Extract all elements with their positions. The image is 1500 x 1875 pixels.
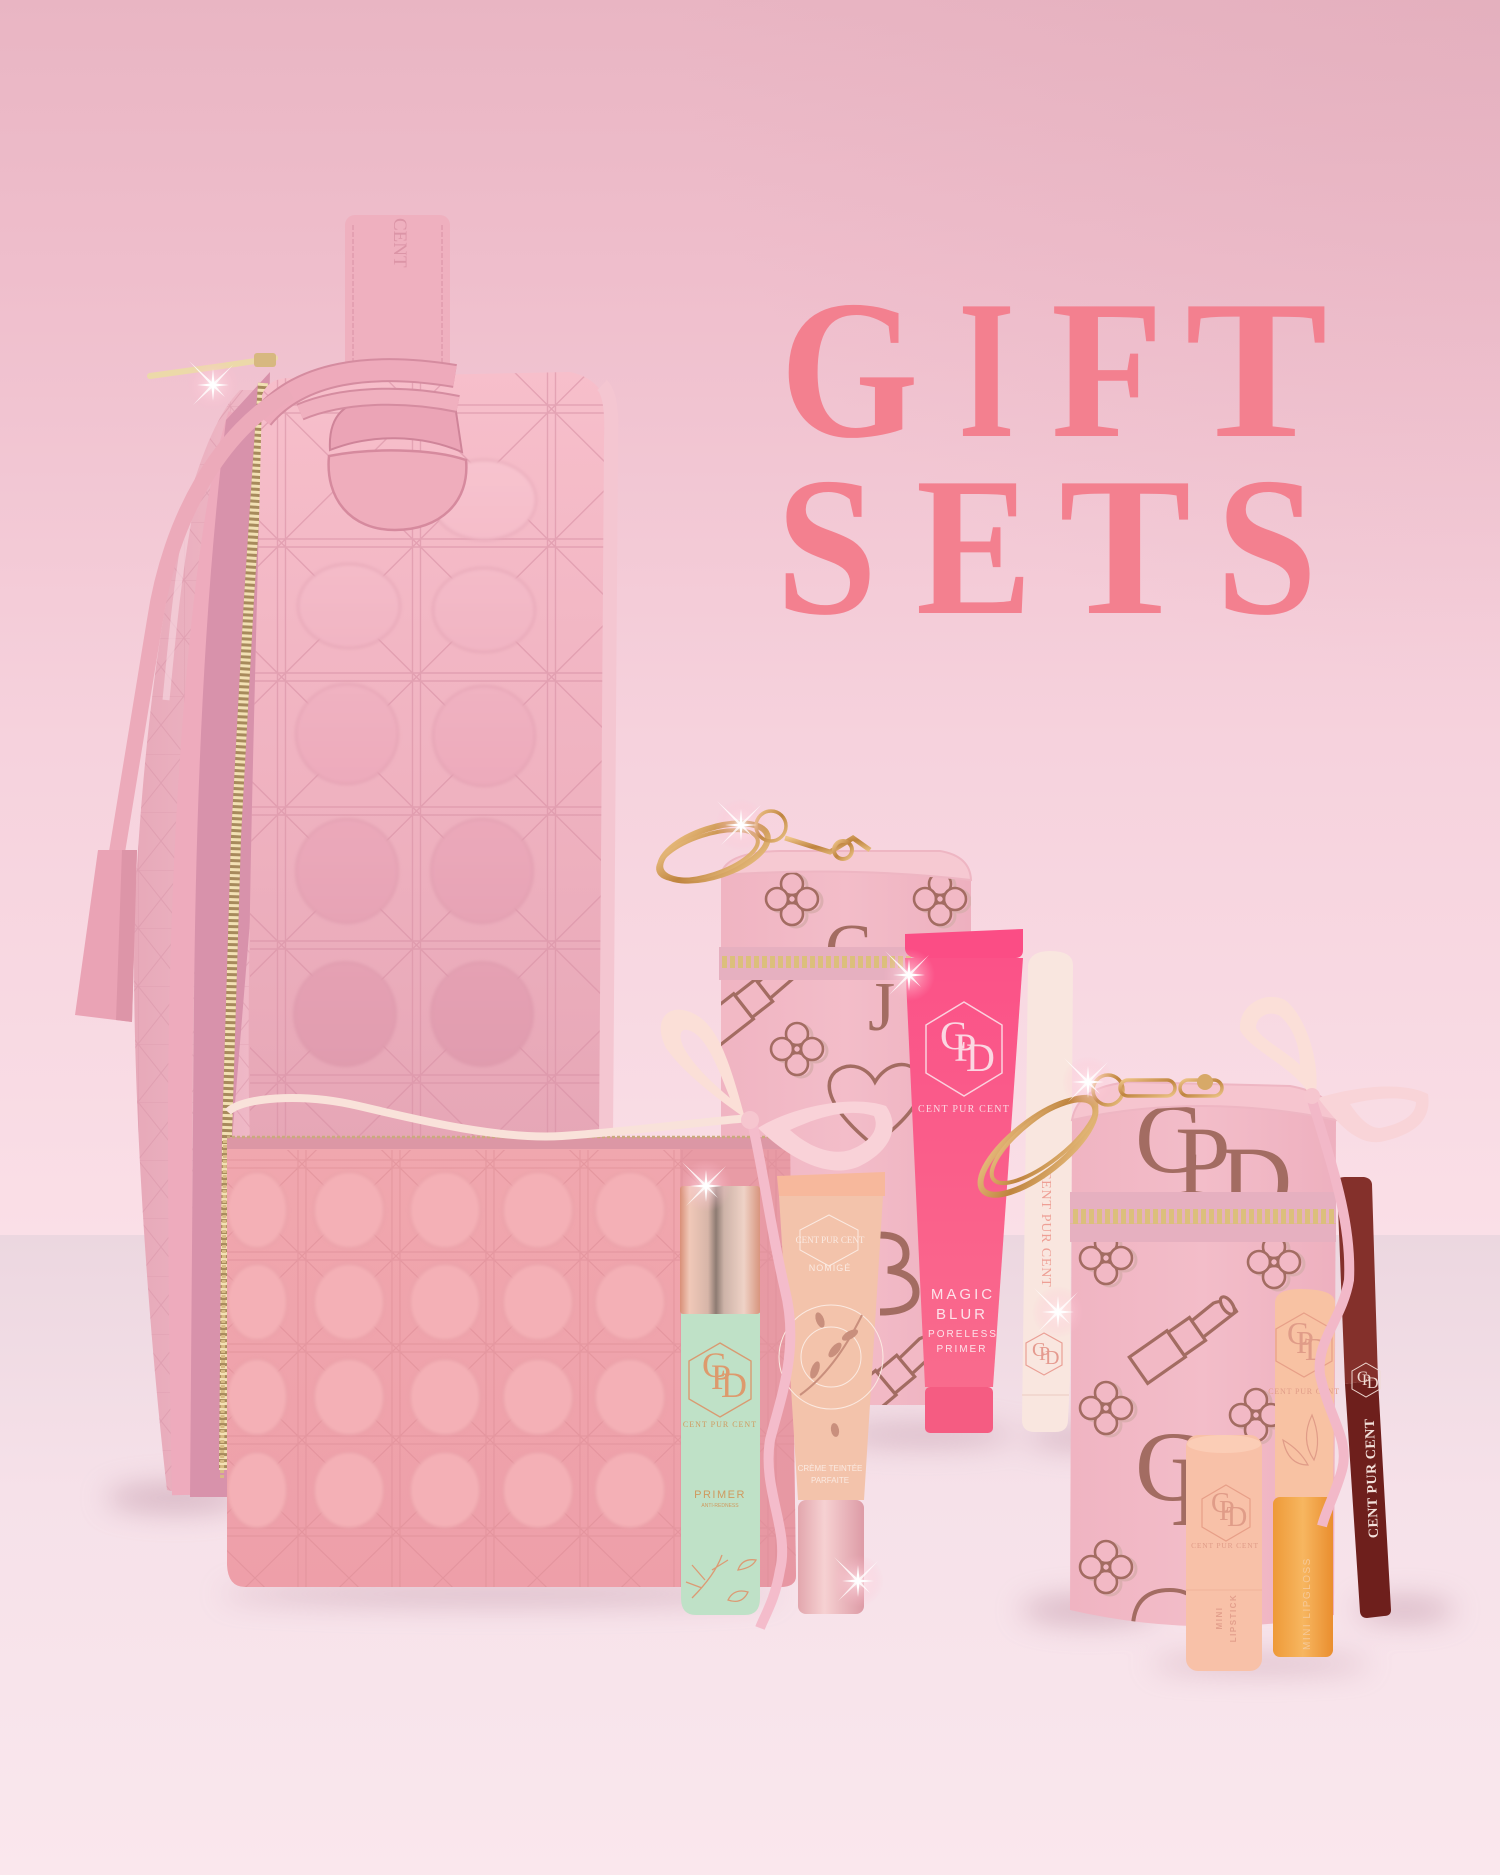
tube brand text: CENT PUR CENT	[918, 1104, 1010, 1115]
back case monogram curves	[880, 1235, 916, 1312]
tube product text: BLUR	[936, 1306, 988, 1323]
lipstick logo: C	[1211, 1488, 1230, 1519]
mini lipgloss	[1268, 1289, 1340, 1657]
pencil logo: C	[1357, 1369, 1368, 1386]
large quilted backpack case	[75, 215, 620, 1497]
primer metal cap	[680, 1186, 760, 1314]
back case zipper band	[719, 947, 974, 980]
peach tube label: CRÈME TEINTÉE	[798, 1464, 862, 1473]
title line: GIFT: T	[1185, 259, 1328, 479]
right case monogram print: D	[1220, 1126, 1292, 1237]
backpack zip pull	[150, 353, 276, 376]
handle embossed text: CENT	[389, 218, 410, 268]
green anti-redness primer	[680, 1186, 760, 1615]
backpack strap tassel	[75, 850, 137, 1022]
tube logo: D	[966, 1035, 995, 1080]
pencil logo	[1352, 1363, 1380, 1397]
primer bottle	[681, 1313, 760, 1615]
title line: GIFT: G	[780, 259, 919, 479]
gloss cap logo: P	[1296, 1324, 1314, 1360]
back case keyring	[652, 811, 870, 892]
quilted pouch	[222, 1137, 800, 1590]
magic blur pink tube	[905, 929, 1023, 1433]
tube logo	[926, 1002, 1002, 1096]
backpack half-moon tab	[329, 450, 466, 530]
right case top rim	[1072, 1082, 1336, 1120]
pencil logo: P	[1362, 1372, 1371, 1389]
title: GIFT SETS	[776, 259, 1328, 657]
peach tinted cream tube	[777, 1172, 885, 1614]
lipstick logo	[1202, 1485, 1250, 1541]
backpack strap keeper loop	[262, 370, 462, 452]
title line: GIFT	[780, 259, 1328, 479]
bow up loop	[1240, 997, 1317, 1092]
back case top rim	[721, 851, 971, 880]
pencil logo: D	[1367, 1375, 1379, 1392]
gloss cap logo	[1276, 1313, 1332, 1377]
brown lip pencil	[1337, 1177, 1391, 1618]
primer text	[683, 1420, 757, 1509]
pouch zip edge	[222, 1137, 792, 1480]
gloss vertical text: MINI LIPGLOSS	[1302, 1557, 1313, 1650]
right monogram case	[1070, 1082, 1336, 1626]
gloss cap logo: D	[1305, 1331, 1328, 1367]
white concealer stick	[1022, 951, 1073, 1432]
bow tail	[752, 1122, 790, 1628]
tube crimp	[905, 929, 1023, 958]
primer text: PRIMER	[694, 1489, 746, 1501]
tube logo: C	[940, 1013, 967, 1058]
back case heart	[829, 1065, 922, 1145]
back case monogram print	[697, 873, 970, 1425]
stick vertical brand text: CENT PUR CENT	[1038, 1170, 1053, 1288]
right case monogram print: P	[1170, 1436, 1226, 1547]
peach tube foliage	[779, 1305, 883, 1438]
background floor	[0, 1235, 1500, 1875]
backpack rim	[180, 415, 240, 1495]
mini lipstick	[1186, 1435, 1262, 1671]
floor shadows	[105, 1425, 1455, 1672]
title line: SETS: E	[916, 438, 1032, 657]
stick logo: C	[1032, 1339, 1045, 1361]
background wall	[0, 0, 1500, 1236]
right case monogram print: C	[1135, 1411, 1202, 1522]
tube product text: PORELESS	[928, 1329, 998, 1340]
ribbon: pouch bow	[228, 1010, 893, 1628]
tube body	[905, 958, 1023, 1387]
tube logo: P	[954, 1025, 976, 1070]
primer logo: D	[721, 1365, 747, 1405]
primer logo: C	[702, 1345, 726, 1385]
stick logo: P	[1039, 1343, 1050, 1365]
primer sprig	[686, 1555, 756, 1601]
pencil brand text: CENT PUR CENT	[1363, 1418, 1382, 1538]
lipstick product text	[1215, 1594, 1238, 1642]
backpack front quilted panel	[249, 370, 620, 1150]
lipstick logo: D	[1227, 1502, 1247, 1533]
title line: SETS: T	[1059, 437, 1191, 656]
title line: SETS	[776, 437, 1317, 657]
tube product text: MAGIC	[931, 1286, 995, 1303]
peach tube body	[779, 1196, 883, 1500]
backpack zip tape	[190, 372, 270, 1497]
back case body	[721, 851, 971, 1405]
lipstick product text: MINI	[1215, 1607, 1224, 1629]
gloss tube	[1273, 1497, 1333, 1657]
bow knot	[741, 1111, 759, 1129]
back monogram case	[719, 850, 972, 1405]
sparkles	[187, 359, 1114, 1607]
tube product text: PRIMER	[937, 1344, 987, 1355]
stick logo: D	[1045, 1347, 1059, 1369]
right case keyring	[967, 1074, 1222, 1211]
gloss cap logo: C	[1287, 1315, 1308, 1351]
bow knot	[1304, 1088, 1320, 1104]
title line: SETS: S	[1216, 437, 1317, 657]
primer logo	[689, 1343, 751, 1417]
lipstick product text: LIPSTICK	[1229, 1594, 1238, 1642]
peach tube metal cap	[798, 1500, 864, 1614]
primer text: ANTI-REDNESS	[701, 1503, 739, 1509]
lipstick logo: P	[1219, 1496, 1235, 1527]
right case body	[1070, 1082, 1336, 1626]
right case monogram print	[1080, 1083, 1304, 1625]
title line: GIFT: I	[958, 260, 1015, 479]
lipstick brand text: CENT PUR CENT	[1191, 1541, 1259, 1550]
ribbon long tail	[228, 1098, 750, 1137]
stick logo	[1026, 1333, 1062, 1375]
peach tube label: PARFAITE	[811, 1476, 849, 1485]
right case monogram print: P	[1175, 1106, 1231, 1217]
right case monogram print: C	[1135, 1083, 1202, 1194]
primer text: CENT PUR CENT	[683, 1420, 757, 1429]
bow right loop	[1318, 1086, 1429, 1142]
gloss cap	[1275, 1289, 1335, 1497]
title line: GIFT: F	[1051, 261, 1163, 479]
peach tube label: NOMIGÉ	[809, 1263, 851, 1273]
bow tail	[1312, 1100, 1349, 1526]
back case monogram print: J	[868, 969, 895, 1046]
bow left loop	[661, 1010, 745, 1118]
title line: SETS: S	[776, 437, 877, 657]
tube cap	[925, 1387, 993, 1433]
backpack side panel	[134, 390, 265, 1497]
backpack gold zipper	[224, 383, 263, 1470]
gloss cap leaf	[1283, 1415, 1318, 1465]
right case zipper band	[1070, 1192, 1336, 1242]
peach tube label	[796, 1215, 865, 1485]
back case monogram print: C	[825, 911, 872, 988]
primer logo: P	[711, 1357, 731, 1397]
tube product text	[928, 1286, 998, 1355]
bow right loop	[758, 1102, 893, 1171]
peach tube crimp	[777, 1172, 885, 1196]
ribbon: right case bow	[1240, 997, 1429, 1526]
gloss cap brand text: CENT PUR CENT	[1268, 1387, 1340, 1396]
backpack top handle	[345, 215, 450, 380]
peach tube label: CENT PUR CENT	[796, 1235, 865, 1245]
backpack shoulder strap	[117, 392, 290, 852]
